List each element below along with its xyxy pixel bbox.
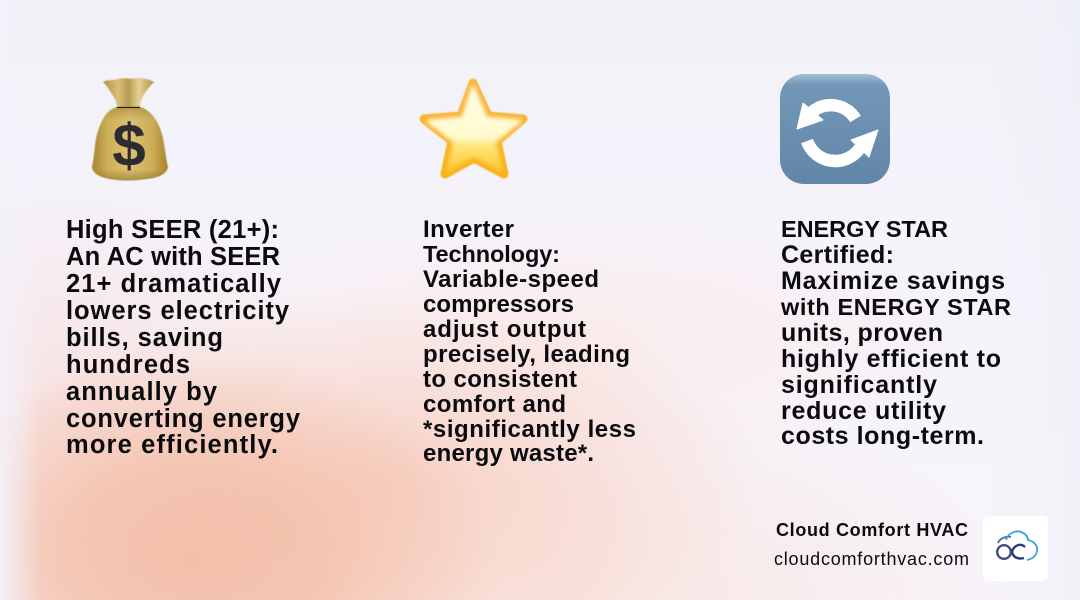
heading and body text: hundreds [66, 351, 190, 379]
heading and body text: converting energy [66, 405, 301, 433]
heading and body text: to consistent [423, 366, 577, 393]
heading and body text: compressors [423, 291, 574, 318]
heading and body text [66, 216, 301, 459]
heading and body text: 21+ dramatically [66, 270, 282, 298]
panel: high SEER [66, 78, 301, 459]
heading and body text: comfort and [423, 391, 566, 418]
heading and body text: energy waste*. [423, 440, 594, 467]
logo tile [983, 516, 1048, 581]
brand footer [774, 516, 1048, 581]
heading and body text: Certified: [781, 241, 894, 269]
heading and body text: precisely, leading [423, 341, 630, 368]
heading and body text: Inverter [423, 216, 514, 243]
dollar sign: $ [112, 112, 146, 179]
heading and body text: units, proven [781, 319, 943, 347]
icon: sync arrows [780, 74, 890, 184]
heading and body text: bills, saving [66, 324, 223, 352]
heading and body text: Variable-speed [423, 266, 599, 293]
heading and body text: lowers electricity [66, 297, 290, 325]
heading and body text: Maximize savings [781, 267, 1005, 295]
brand name: Cloud Comfort HVAC [776, 520, 968, 540]
heading and body text: highly efficient to [781, 345, 1001, 373]
icon: money bag [92, 78, 168, 180]
heading and body text: significantly [781, 371, 937, 399]
panel: ENERGY STAR certified [780, 74, 1011, 450]
heading and body text: adjust output [423, 316, 586, 343]
heading and body text: costs long-term. [781, 422, 984, 450]
heading and body text: High SEER (21+): [66, 216, 279, 244]
website: cloudcomforthvac.com [774, 549, 969, 569]
heading and body text: with ENERGY STAR [780, 294, 1011, 320]
heading and body text: ENERGY STAR [781, 216, 948, 242]
icon: star [424, 83, 523, 174]
heading and body text [423, 216, 636, 467]
heading and body text: Technology: [423, 241, 560, 267]
heading and body text: An AC with SEER [66, 243, 280, 271]
heading and body text: *significantly less [423, 416, 636, 443]
heading and body text [780, 216, 1011, 450]
heading and body text: more efficiently. [66, 431, 278, 459]
panel: inverter technology [423, 83, 636, 467]
heading and body text: annually by [66, 378, 218, 406]
heading and body text: reduce utility [781, 397, 946, 425]
